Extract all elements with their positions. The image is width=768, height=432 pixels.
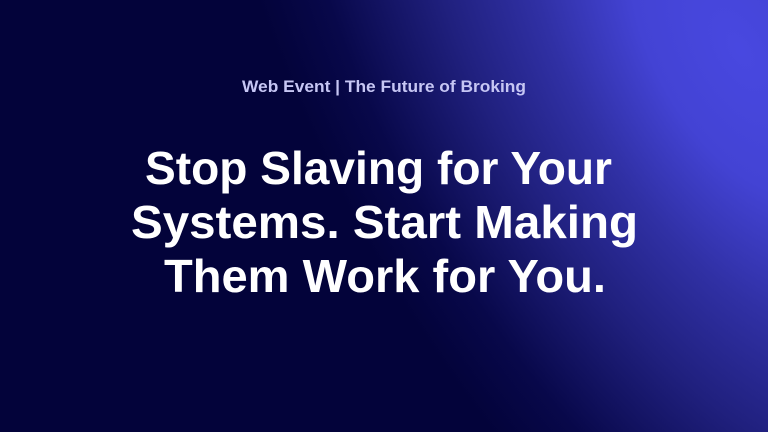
headline: Them Work for You.	[164, 250, 606, 302]
headline: Systems. Start Making	[131, 196, 638, 248]
event label: Web Event | The Future of Broking	[242, 78, 526, 96]
headline	[131, 142, 638, 302]
headline: Stop Slaving for Your	[145, 142, 612, 194]
